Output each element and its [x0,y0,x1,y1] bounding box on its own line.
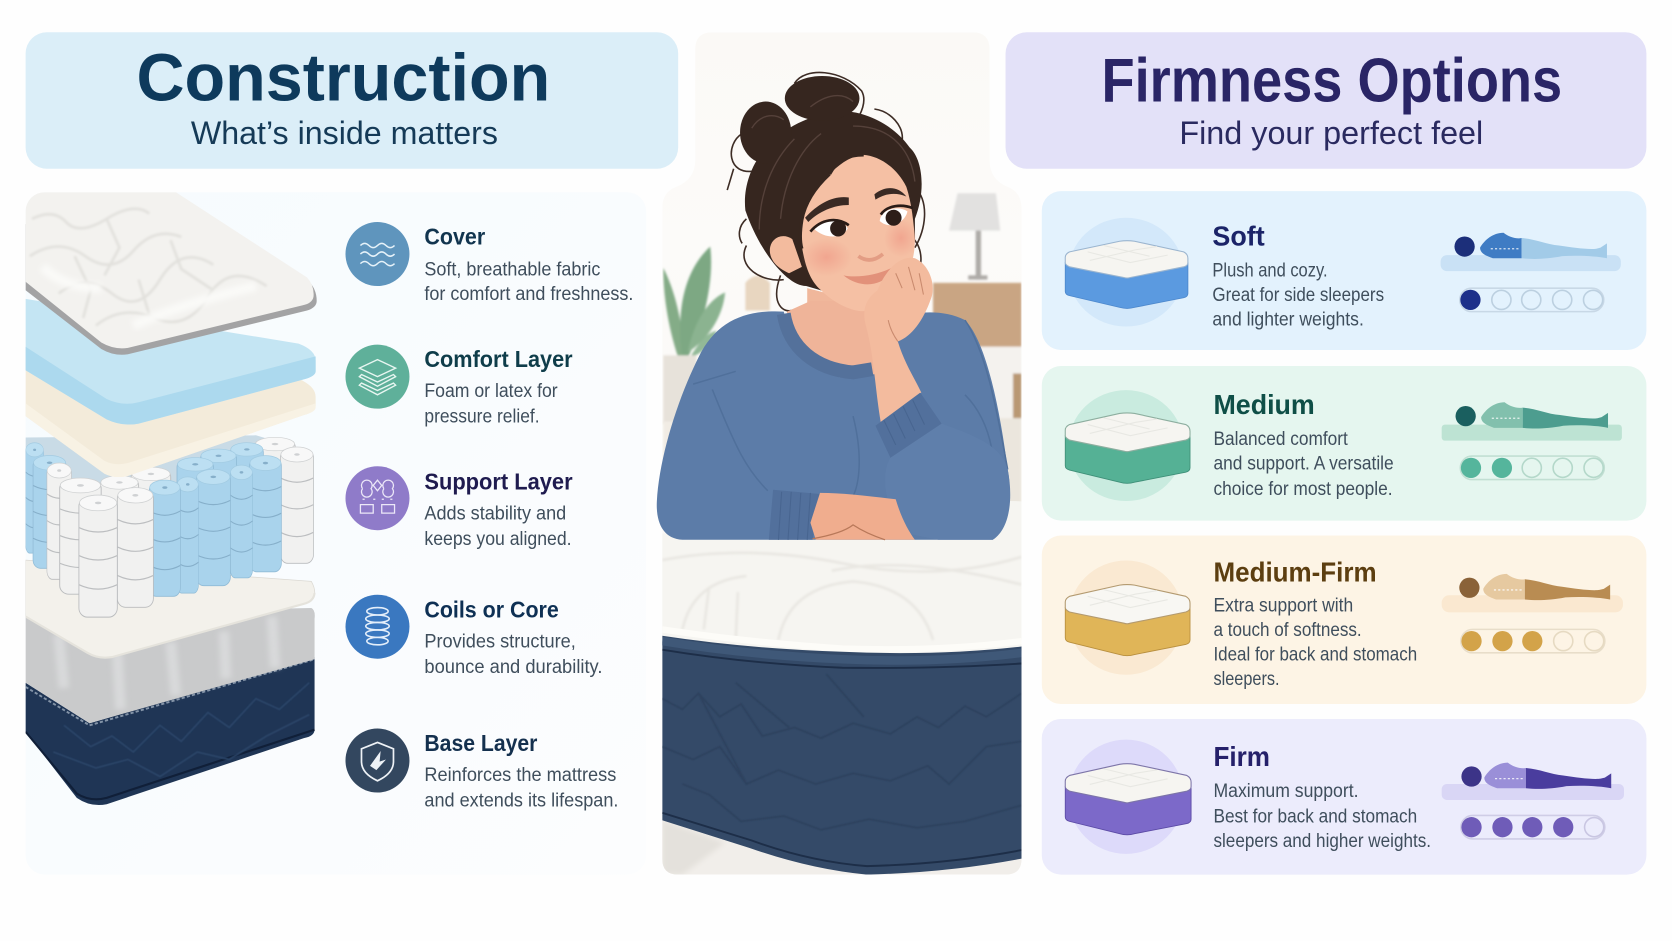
firmness scale 2 of 5 [1460,456,1604,480]
item: coils or core: bounce and durability. [424,657,602,678]
comfort foam layer [26,299,316,425]
base layer [26,657,315,805]
panel: centre illustration [657,32,1022,875]
cream layer [26,363,316,477]
card: soft: Great for side sleepers [1212,285,1384,306]
illustration: exploded mattress layers [26,192,317,805]
base layer text: Base Layer [424,730,537,756]
heading: firmness options: Firmness Options [1102,47,1562,116]
comfort layer text: Comfort Layer [424,346,573,372]
item: comfort layer: pressure relief. [424,407,540,428]
card: medium-firm: Extra support with [1213,595,1353,616]
icon: shield [345,729,409,793]
item: base layer: and extends its lifespan. [424,790,618,811]
ribbed collar [784,314,872,372]
right cuff [875,393,942,458]
card: medium-firm [1042,536,1646,704]
coils or core text: Coils or Core [424,597,559,623]
firmness scale 3 of 5 [1461,629,1605,653]
mattress top [1010,501,1022,504]
sleeper on medium-firm mattress [1442,574,1623,612]
neck [807,288,869,368]
hair back and buns [740,76,922,293]
card: firm: sleepers and higher weights. [1213,831,1431,852]
medium text: Medium [1213,389,1315,420]
grey foam layer [26,608,315,723]
icon: soft mattress [1065,218,1188,327]
heading: Construction: Construction [136,40,550,115]
item: comfort layer [345,345,573,428]
panel: firmness header [1006,32,1646,169]
icon: medium mattress [1065,390,1190,501]
sleeper on medium mattress [1442,402,1622,441]
bedroom background [662,192,1022,874]
card: medium [1042,366,1646,521]
forearm and hand [864,258,933,423]
nose [858,254,883,260]
mattress navy side [662,636,1022,875]
icon: firm mattress [1065,740,1191,854]
card: medium-firm: Ideal for back and stomach [1213,644,1417,665]
icon: waves [345,222,409,286]
card: medium-firm: a touch of softness. [1213,620,1362,641]
panel: construction header [26,32,678,169]
sleeper on soft mattress [1441,233,1621,271]
card: firm: Maximum support. [1213,781,1359,802]
item: base layer: Reinforces the mattress [424,765,616,786]
card: medium-firm: sleepers. [1213,669,1280,690]
subheading: find your perfect feel: Find your perfect feel [1179,115,1483,151]
item: cover: Soft, breathable fabric [424,259,601,280]
headboard and bed [663,276,1022,504]
item: base layer [345,729,618,811]
card: firm [1042,719,1646,875]
hair strands over forehead [800,155,864,249]
card: soft: Plush and cozy. [1212,260,1328,281]
blush [801,219,918,276]
icon: medium-firm mattress [1065,560,1190,675]
item: coils or core [345,595,602,678]
folded hands [810,493,915,540]
subheading: what's inside matters: What’s inside matters [191,115,498,151]
firmness scale 1 of 5 [1460,288,1604,312]
table lamp [949,193,1000,280]
item: support layer: Adds stability and [424,504,566,525]
icon: layers [345,345,409,409]
item: coils or core: Provides structure, [424,632,576,653]
medium-firm text: Medium-Firm [1213,556,1377,587]
ear [770,236,802,273]
eyes [810,206,913,236]
item: cover: for comfort and freshness. [424,284,633,305]
right sleeve [885,424,1010,540]
face [801,155,915,311]
icon: coil spring [345,595,409,659]
illustration: woman leaning on mattress [657,72,1010,540]
card: firm: Best for back and stomach [1213,806,1417,827]
quilted cover layer [26,192,317,355]
item: support layer [345,466,573,550]
panel: construction layers [26,192,632,810]
sweater shading [693,320,1008,496]
sweater torso [657,311,1010,540]
card: medium: and support. A versatile [1213,453,1394,474]
floor [662,811,1022,875]
card: medium: Balanced comfort [1213,429,1348,450]
loose hair strands behind [727,72,925,311]
sleeper on firm mattress [1442,763,1624,800]
cover text: Cover [424,223,485,249]
card: soft [1042,191,1646,350]
item: support layer: keeps you aligned. [424,529,572,550]
firmness scale 4 of 5 [1461,815,1605,839]
support layer text: Support Layer [424,469,573,495]
hair highlights [752,96,915,230]
eyebrows [805,188,906,222]
card: soft: and lighter weights. [1212,309,1364,330]
left cuff [769,490,820,540]
chest skin [787,301,885,376]
plant [663,247,725,424]
firm text: Firm [1213,741,1270,772]
white support layer [26,560,315,658]
smile [843,267,894,284]
item: cover [345,222,633,305]
card: medium: choice for most people. [1213,479,1393,500]
item: comfort layer: Foam or latex for [424,381,558,402]
soft text: Soft [1212,221,1265,252]
coils [26,435,313,617]
icon: support nodes [345,466,409,530]
